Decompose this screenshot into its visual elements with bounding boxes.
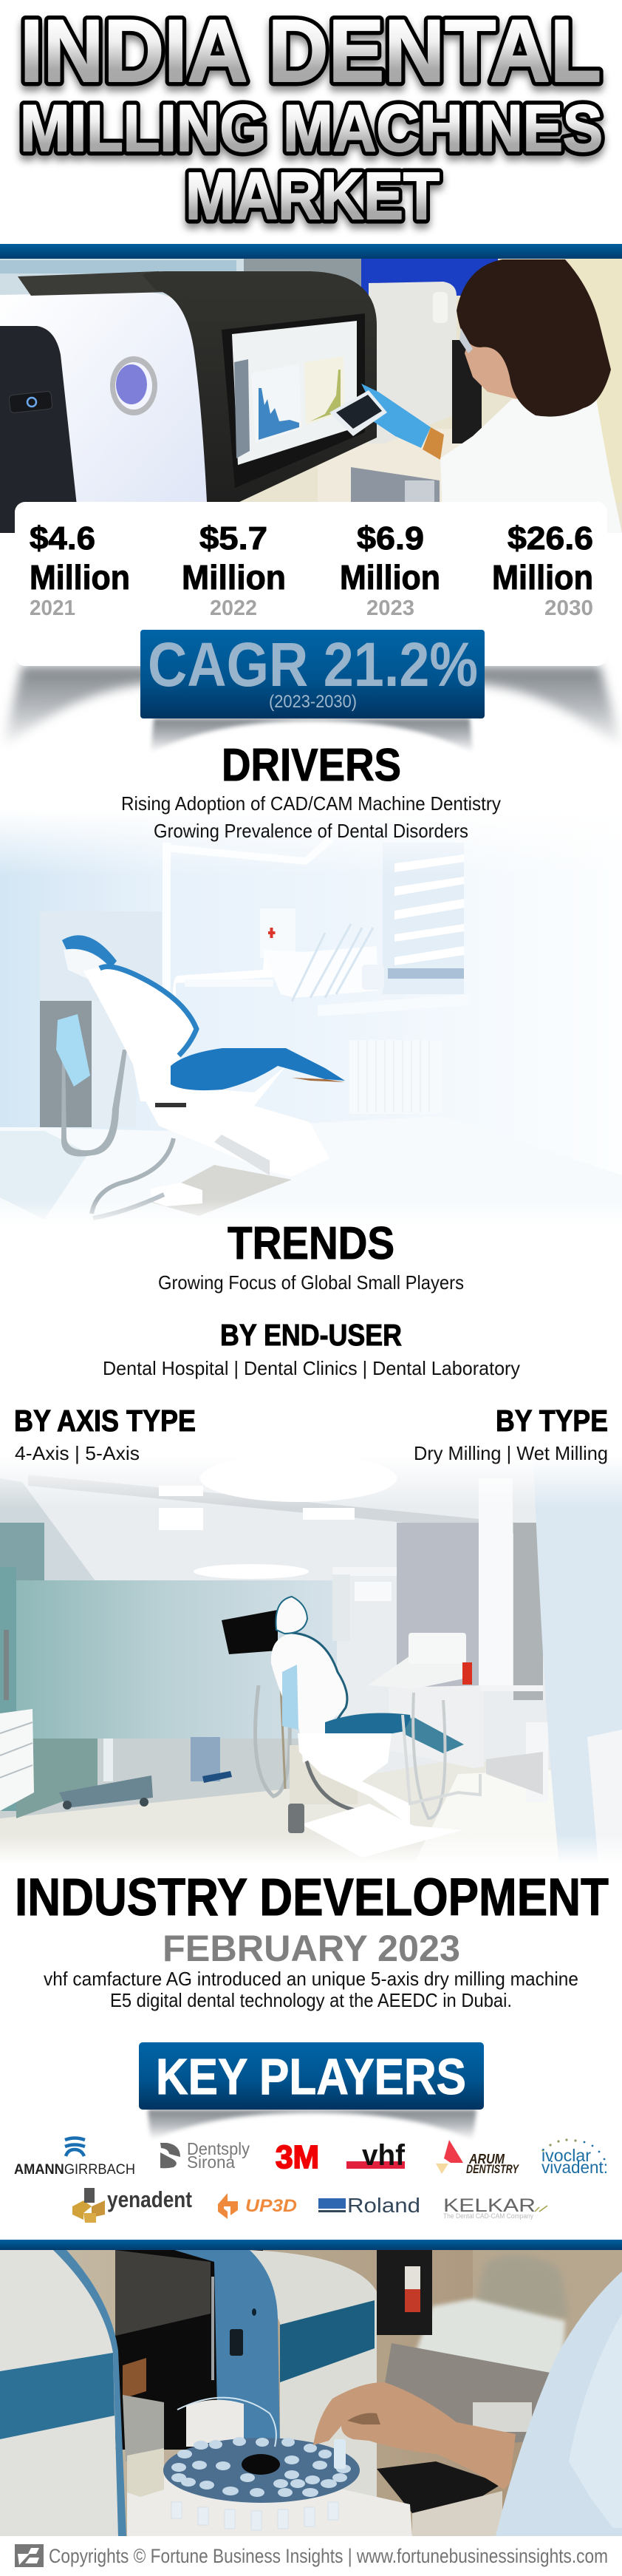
stat 2030: Million bbox=[492, 558, 593, 597]
segment: by type: Dry Milling | Wet Milling bbox=[414, 1442, 608, 1464]
logo: Roland bbox=[318, 2194, 420, 2217]
logo: UP3D bbox=[218, 2193, 297, 2219]
logo: Amann Girrbach bbox=[14, 2138, 135, 2178]
key players badge: KEY PLAYERS bbox=[156, 2048, 466, 2105]
key players shadow bbox=[148, 2110, 476, 2140]
CAGR badge: (2023-2030) bbox=[269, 692, 357, 712]
logo: Kelkar bbox=[443, 2195, 547, 2220]
stat 2023 bbox=[340, 520, 440, 620]
logo: vhf: vhf bbox=[362, 2139, 406, 2172]
industry development: vhf camfacture AG introduced an unique 5-axis dry milling machine bbox=[44, 1968, 578, 1990]
heading: trends: Growing Focus of Global Small Players bbox=[158, 1271, 464, 1294]
stat 2021: Million bbox=[30, 558, 130, 597]
segment: by axis type: 4-Axis | 5-Axis bbox=[15, 1442, 140, 1464]
panel: market size card bbox=[15, 502, 607, 666]
heading: drivers: Growing Prevalence of Dental Disorders bbox=[154, 820, 468, 842]
industry development: E5 digital dental technology at the AEEDC in Dubai. bbox=[110, 1989, 512, 2011]
logo: Yenadent: yenadent bbox=[107, 2186, 192, 2212]
segment: by end-user bbox=[103, 1318, 520, 1379]
stat 2022: Million bbox=[182, 558, 286, 597]
stat 2030: $26.6 bbox=[507, 520, 593, 557]
logo: Dentsply Sirona bbox=[160, 2139, 250, 2172]
stat 2021 bbox=[30, 520, 130, 620]
logo: Roland: Roland bbox=[347, 2194, 420, 2217]
segment: by type: BY TYPE bbox=[496, 1404, 608, 1438]
title: MARKET bbox=[185, 160, 440, 234]
photo: dental chair room bbox=[0, 809, 622, 1227]
top blue bar bbox=[0, 244, 622, 259]
logo: Ivoclar Vivadent: ivoclar bbox=[541, 2146, 591, 2165]
heading: drivers bbox=[121, 740, 501, 842]
title: MARKET bbox=[185, 160, 440, 234]
logo: Arum Dentistry bbox=[436, 2140, 519, 2176]
segment: by end-user: Dental Hospital | Dental Clinics | Dental Laboratory bbox=[103, 1357, 520, 1379]
title: INDIA DENTAL bbox=[20, 1, 601, 101]
logo: 3M: 3M bbox=[276, 2139, 319, 2175]
heading: drivers: Rising Adoption of CAD/CAM Machine Dentistry bbox=[121, 792, 501, 815]
segment: by axis type: BY AXIS TYPE bbox=[14, 1404, 196, 1438]
segment: by end-user: BY END-USER bbox=[220, 1318, 402, 1352]
logo: Arum Dentistry: DENTISTRY bbox=[466, 2162, 519, 2176]
stat 2021: 2021 bbox=[30, 597, 75, 620]
industry development: FEBRUARY 2023 bbox=[163, 1928, 460, 1969]
logo: Dentsply Sirona: Sirona bbox=[187, 2152, 235, 2172]
stat 2022 bbox=[182, 520, 286, 620]
segment: by axis type bbox=[14, 1404, 196, 1464]
bottom blue bar bbox=[0, 2240, 622, 2250]
icon: Fortune Business Insights logo bbox=[15, 2544, 44, 2567]
logo: Arum Dentistry: ARUM bbox=[468, 2152, 505, 2167]
stat 2022: $5.7 bbox=[199, 520, 267, 557]
CAGR badge: CAGR 21.2% bbox=[148, 630, 478, 699]
logo: Ivoclar Vivadent bbox=[541, 2138, 608, 2177]
logo: Ivoclar Vivadent: vivadent: bbox=[541, 2158, 608, 2177]
card shadow bbox=[3, 666, 622, 748]
logo: Dentsply Sirona: Dentsply bbox=[187, 2139, 250, 2158]
logo: Yenadent bbox=[72, 2186, 192, 2223]
heading: trends bbox=[158, 1218, 464, 1294]
stat 2030: 2030 bbox=[544, 597, 593, 620]
logo: Kelkar: KELKAR bbox=[443, 2195, 536, 2216]
stat 2023: 2023 bbox=[366, 597, 414, 620]
stat 2023: Million bbox=[340, 558, 440, 597]
heading: drivers: DRIVERS bbox=[222, 740, 401, 791]
photo: dental clinic room bbox=[0, 1455, 622, 1864]
title bbox=[20, 1, 603, 234]
stat 2021: $4.6 bbox=[30, 520, 95, 557]
CAGR box shadow bbox=[151, 718, 473, 752]
stat 2022: 2022 bbox=[210, 597, 257, 620]
logo: UP3D: UP3D bbox=[245, 2196, 297, 2216]
logo: Kelkar: The Dental CAD-CAM Company bbox=[443, 2212, 533, 2220]
stat 2023: $6.9 bbox=[357, 520, 424, 557]
logo: Amann Girrbach: AMANNGIRRBACH bbox=[14, 2162, 135, 2178]
title: INDIA DENTAL bbox=[20, 1, 601, 101]
stat 2030 bbox=[492, 520, 593, 620]
segment: by type bbox=[414, 1404, 608, 1464]
photo: sample carousel bbox=[0, 2250, 622, 2536]
industry development bbox=[15, 1869, 609, 2011]
photo: lab technician at analyzer bbox=[0, 259, 622, 533]
heading: trends: TRENDS bbox=[228, 1218, 394, 1269]
